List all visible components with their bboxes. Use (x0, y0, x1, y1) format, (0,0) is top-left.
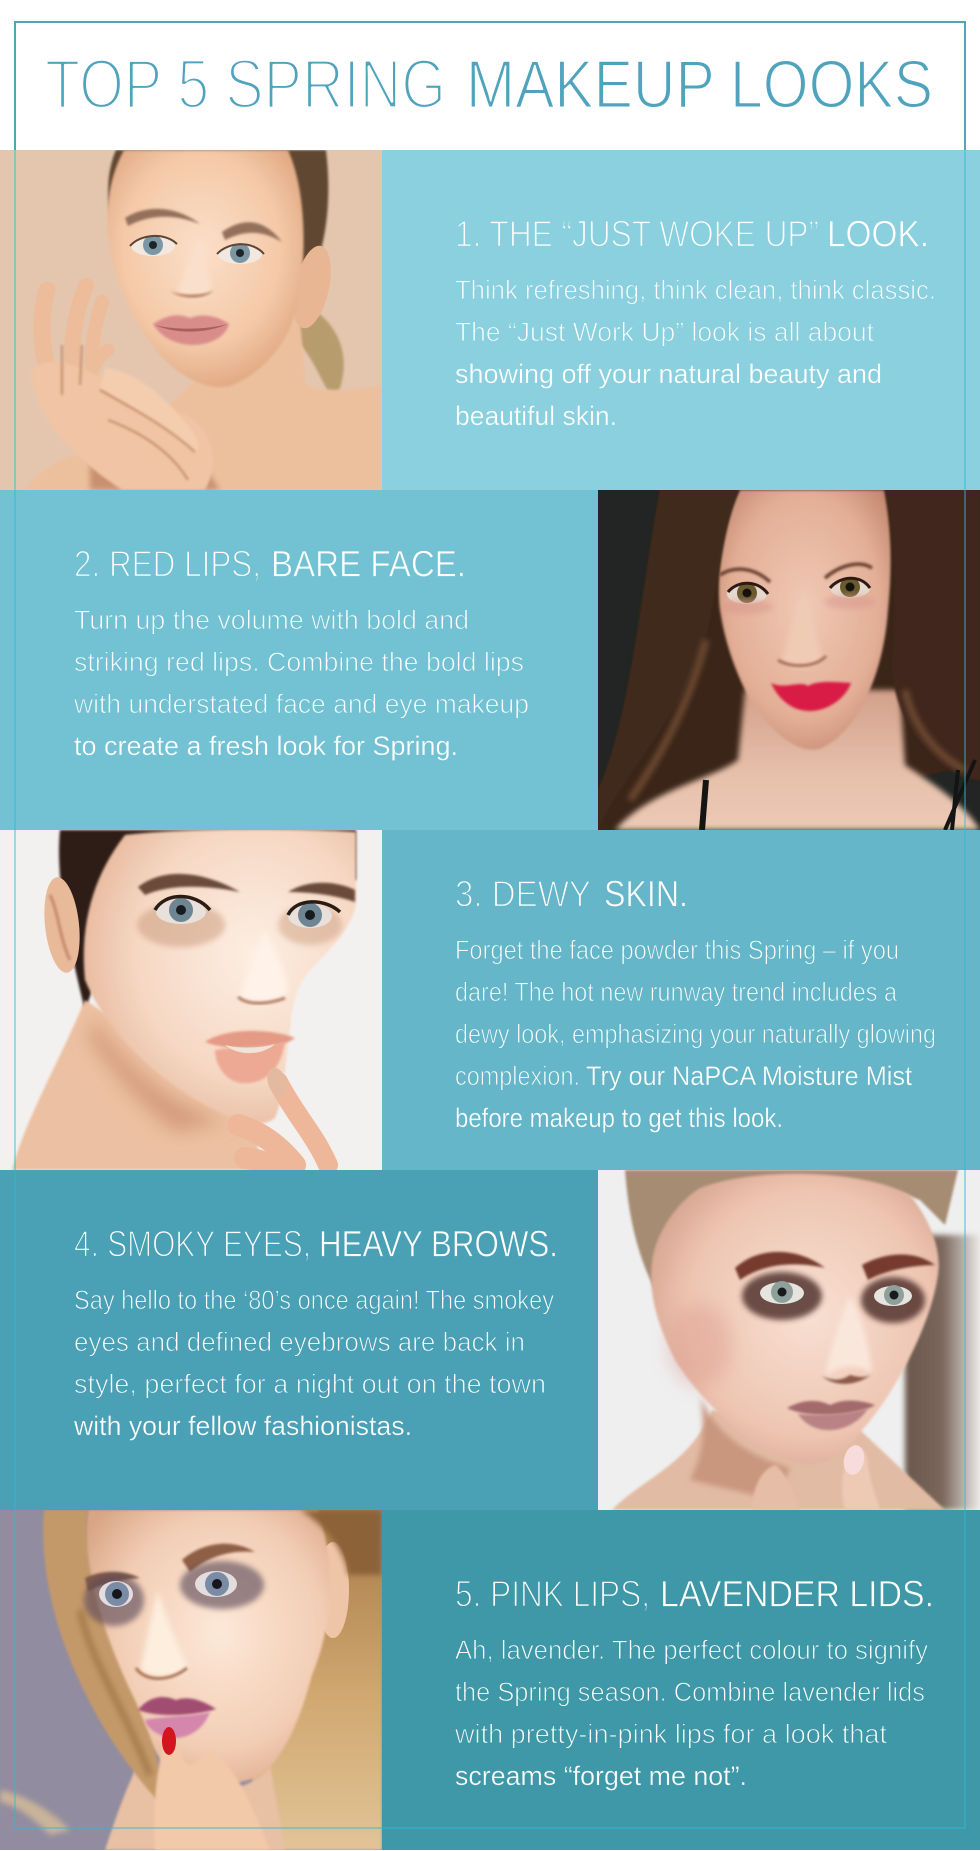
text block: look 5: the Spring season. Combine lavender lids (455, 1677, 925, 1707)
heading: look 2 (74, 544, 466, 584)
text block: look 2: to create a fresh look for Spring. (74, 731, 458, 761)
text block: look 3: dare! The hot new runway trend includes a (455, 977, 898, 1007)
panel: look 5 (382, 1510, 980, 1850)
panel: look 3 (382, 830, 980, 1170)
heading: look 1: 1. THE “JUST WOKE UP” (455, 214, 819, 254)
heading: look 2: BARE FACE. (271, 544, 466, 584)
text block: look 2: striking red lips. Combine the bold lips (74, 647, 524, 677)
text block: look 2 (73, 605, 529, 761)
text block: look 1: showing off your natural beauty and (455, 359, 882, 389)
heading: look 4: 4. SMOKY EYES, (74, 1224, 311, 1264)
text block: look 2: with understated face and eye makeup (73, 689, 529, 719)
text block: look 4: style, perfect for a night out on the town (74, 1369, 546, 1399)
panel: look 4 (0, 1170, 598, 1510)
photo: look 1 portrait (0, 150, 382, 490)
photo: look 3 portrait (0, 829, 382, 1175)
title: TOP 5 SPRING (45, 45, 446, 123)
heading: look 4 (74, 1224, 558, 1264)
text block: look 3: Forget the face powder this Spring – if you (455, 935, 899, 965)
text block: look 3: before makeup to get this look. (455, 1103, 783, 1133)
text block: look 4: Say hello to the ‘80’s once again! The smokey (74, 1285, 554, 1315)
frame: top section (15, 22, 965, 150)
photo: look 5 portrait (0, 1510, 382, 1850)
text block: look 4 (73, 1285, 554, 1441)
heading: look 2: 2. RED LIPS, (74, 544, 261, 584)
text block: look 1: Think refreshing, think clean, think classic. (455, 275, 936, 305)
heading: look 3: SKIN. (604, 874, 688, 914)
text block: look 3: complexion. (455, 1061, 580, 1091)
text block: look 1 (455, 275, 936, 431)
heading: look 4: HEAVY BROWS. (319, 1224, 558, 1264)
photo: look 4 portrait (598, 1170, 980, 1510)
heading: look 5 (455, 1574, 934, 1614)
heading: look 5: 5. PINK LIPS, (455, 1574, 650, 1614)
heading: look 3 (455, 874, 688, 914)
text block: look 5: Ah, lavender. The perfect colour to signify (455, 1635, 928, 1665)
panel: look 1 (382, 150, 980, 490)
text block: look 3 (455, 935, 936, 1133)
text block: look 4: eyes and defined eyebrows are back in (74, 1327, 525, 1357)
text block: look 5: with pretty-in-pink lips for a look that (454, 1719, 887, 1749)
panel: look 2 (0, 490, 598, 830)
text block: look 3: Try our NaPCA Moisture Mist (586, 1061, 912, 1091)
text block: look 1: beautiful skin. (455, 401, 617, 431)
title (45, 45, 933, 123)
text block: look 4: with your fellow fashionistas. (73, 1411, 412, 1441)
text block: look 5 (454, 1635, 928, 1791)
photo: look 2 portrait (598, 490, 980, 830)
text block: look 1: The “Just Work Up” look is all about (455, 317, 874, 347)
heading: look 3: 3. DEWY (455, 874, 591, 914)
text block: look 2: Turn up the volume with bold and (74, 605, 469, 635)
text block: look 5: screams “forget me not”. (455, 1761, 747, 1791)
heading: look 5: LAVENDER LIDS. (660, 1574, 934, 1614)
heading: look 1: LOOK. (827, 214, 929, 254)
